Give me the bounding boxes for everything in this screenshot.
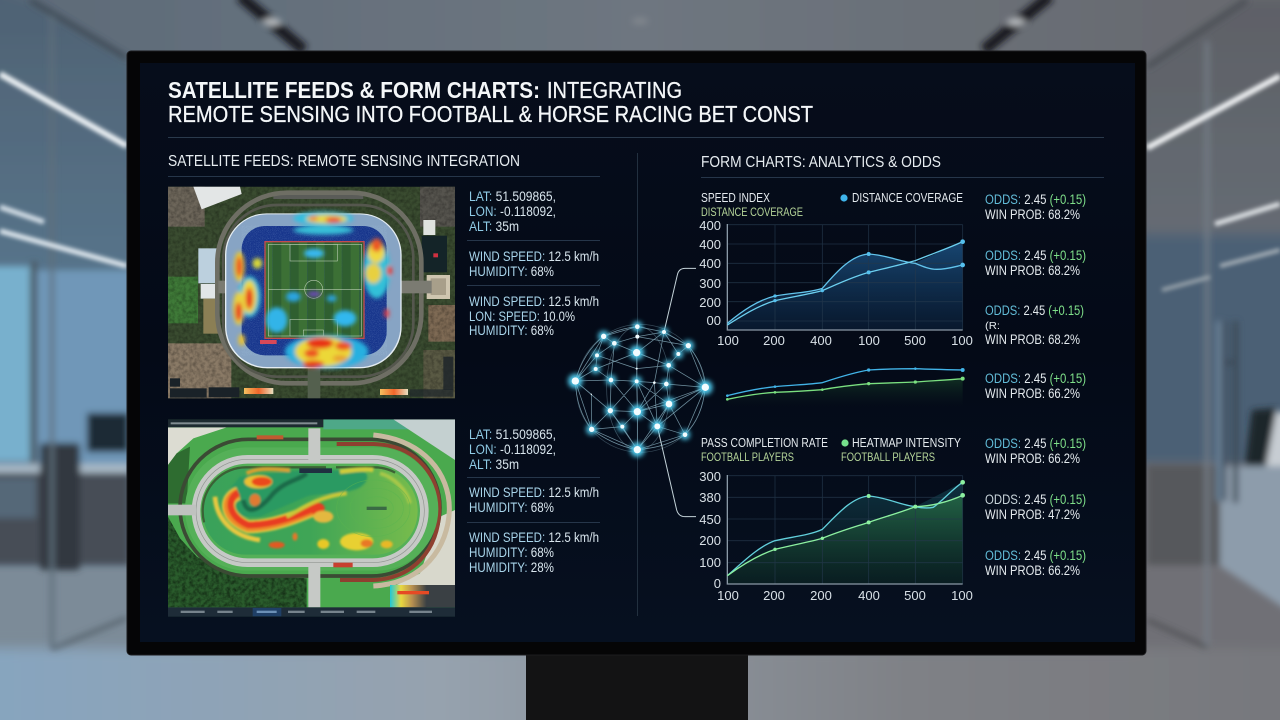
line chart: speed index xyxy=(699,218,973,348)
racecourse readouts: HUMIDITY: 28% xyxy=(469,560,554,575)
stadium satellite heatmap xyxy=(168,187,455,398)
stadium readouts xyxy=(467,189,600,338)
line chart: pass completion: 100 xyxy=(699,555,721,570)
line chart: speed index: 00 xyxy=(707,313,721,328)
odds column: WIN PROB: 68.2% xyxy=(985,263,1080,278)
racecourse readouts: HUMIDITY: 68% xyxy=(469,545,554,560)
line chart: pass completion: 200 xyxy=(699,533,721,548)
stadium readouts: HUMIDITY: 68% xyxy=(469,323,554,338)
neural network graphic xyxy=(569,268,711,517)
odds column: WIN PROB: 66.2% xyxy=(985,563,1080,578)
racecourse readouts xyxy=(467,427,600,575)
stadium readouts: LON: SPEED: 10.0% xyxy=(469,309,575,324)
connector arrows xyxy=(657,268,696,517)
odds column xyxy=(985,192,1086,578)
legend: pass completion chart: FOOTBALL PLAYERS xyxy=(701,450,794,464)
legend: speed index chart: SPEED INDEX xyxy=(701,190,770,205)
racecourse readouts: WIND SPEED: 12.5 km/h xyxy=(469,530,599,545)
racecourse readouts: LON: -0.118092, xyxy=(469,442,556,457)
line chart: speed index: 100 xyxy=(951,333,973,348)
legend: speed index chart: DISTANCE COVERAGE xyxy=(852,190,963,205)
line chart: speed index: 400 xyxy=(699,218,721,233)
racecourse readouts: ALT: 35m xyxy=(469,457,519,472)
odds column: ODDS: 2.45 (+0.15) xyxy=(985,371,1086,386)
odds column: (R: xyxy=(985,321,1000,332)
stadium readouts: LAT: 51.509865, xyxy=(469,189,556,204)
line chart: speed index: 200 xyxy=(699,295,721,310)
odds column: ODDS: 2.45 (+0.15) xyxy=(985,248,1086,263)
title: SATELLITE FEEDS & FORM CHARTS: xyxy=(168,77,540,103)
line chart: pass completion: 200 xyxy=(810,588,832,603)
line chart: speed index: 100 xyxy=(717,333,739,348)
legend: pass completion chart: FOOTBALL PLAYERS xyxy=(841,450,935,464)
stadium readouts: ALT: 35m xyxy=(469,219,519,234)
odds column: ODDS: 2.45 (+0.15) xyxy=(985,492,1086,507)
line chart: pass completion: 200 xyxy=(763,588,785,603)
stadium readouts: WIND SPEED: 12.5 km/h xyxy=(469,249,599,264)
line chart: speed index: 100 xyxy=(858,333,880,348)
line chart: pass completion: 380 xyxy=(699,490,721,505)
line chart: pass completion: 500 xyxy=(904,588,926,603)
title: INTEGRATING xyxy=(547,77,682,103)
line chart: pass completion: 450 xyxy=(699,512,721,527)
line chart: pass completion: 0 xyxy=(714,576,721,591)
line chart: speed index: 500 xyxy=(904,333,926,348)
odds column: WIN PROB: 68.2% xyxy=(985,332,1080,347)
racecourse readouts: HUMIDITY: 68% xyxy=(469,500,554,515)
line chart: pass completion: 300 xyxy=(699,469,721,484)
odds column: WIN PROB: 68.2% xyxy=(985,207,1080,222)
line chart: speed index: 300 xyxy=(699,276,721,291)
legend: pass completion chart: PASS COMPLETION RATE xyxy=(701,435,828,450)
stadium readouts: HUMIDITY: 68% xyxy=(469,264,554,279)
heading: form charts: FORM CHARTS: ANALYTICS & ODDS xyxy=(701,154,941,171)
monitor bezel xyxy=(127,51,1146,655)
title: REMOTE SENSING INTO FOOTBALL & HORSE RACING BET CONST xyxy=(168,101,813,127)
line chart: speed index: 400 xyxy=(810,333,832,348)
monitor screen xyxy=(140,63,1135,642)
network links xyxy=(575,324,705,452)
heading: satellite feeds: SATELLITE FEEDS: REMOTE SENSING INTEGRATION xyxy=(168,153,520,170)
line chart: pass completion xyxy=(699,469,973,603)
mini line chart xyxy=(726,367,965,407)
stadium readouts: WIND SPEED: 12.5 km/h xyxy=(469,294,599,309)
odds column: WIN PROB: 47.2% xyxy=(985,507,1080,522)
stadium readouts: LON: -0.118092, xyxy=(469,204,556,219)
legend: pass completion chart: HEATMAP INTENSITY xyxy=(852,435,961,450)
racecourse satellite heatmap xyxy=(168,419,455,617)
line chart: pass completion: 100 xyxy=(717,588,739,603)
legend: pass completion chart xyxy=(701,435,961,464)
legend: speed index chart xyxy=(701,190,963,219)
odds column: ODDS: 2.45 (+0.15) xyxy=(985,548,1086,563)
line chart: speed index: 200 xyxy=(763,333,785,348)
line chart: pass completion: 100 xyxy=(951,588,973,603)
odds column: ODDS: 2.45 (+0.15) xyxy=(985,192,1086,207)
line chart: speed index: 400 xyxy=(699,256,721,271)
odds column: WIN PROB: 66.2% xyxy=(985,451,1080,466)
racecourse readouts: LAT: 51.509865, xyxy=(469,427,556,442)
legend: speed index chart: DISTANCE COVERAGE xyxy=(701,205,803,219)
odds column: WIN PROB: 66.2% xyxy=(985,386,1080,401)
odds column: ODDS: 2.45 (+0.15) xyxy=(985,436,1086,451)
odds column: ODDS: 2.45 (+0.15) xyxy=(985,303,1084,318)
racecourse readouts: WIND SPEED: 12.5 km/h xyxy=(469,485,599,500)
line chart: pass completion: 400 xyxy=(858,588,880,603)
line chart: speed index: 400 xyxy=(699,237,721,252)
monitor stand xyxy=(526,650,748,720)
network nodes xyxy=(569,323,711,456)
title xyxy=(168,77,813,127)
